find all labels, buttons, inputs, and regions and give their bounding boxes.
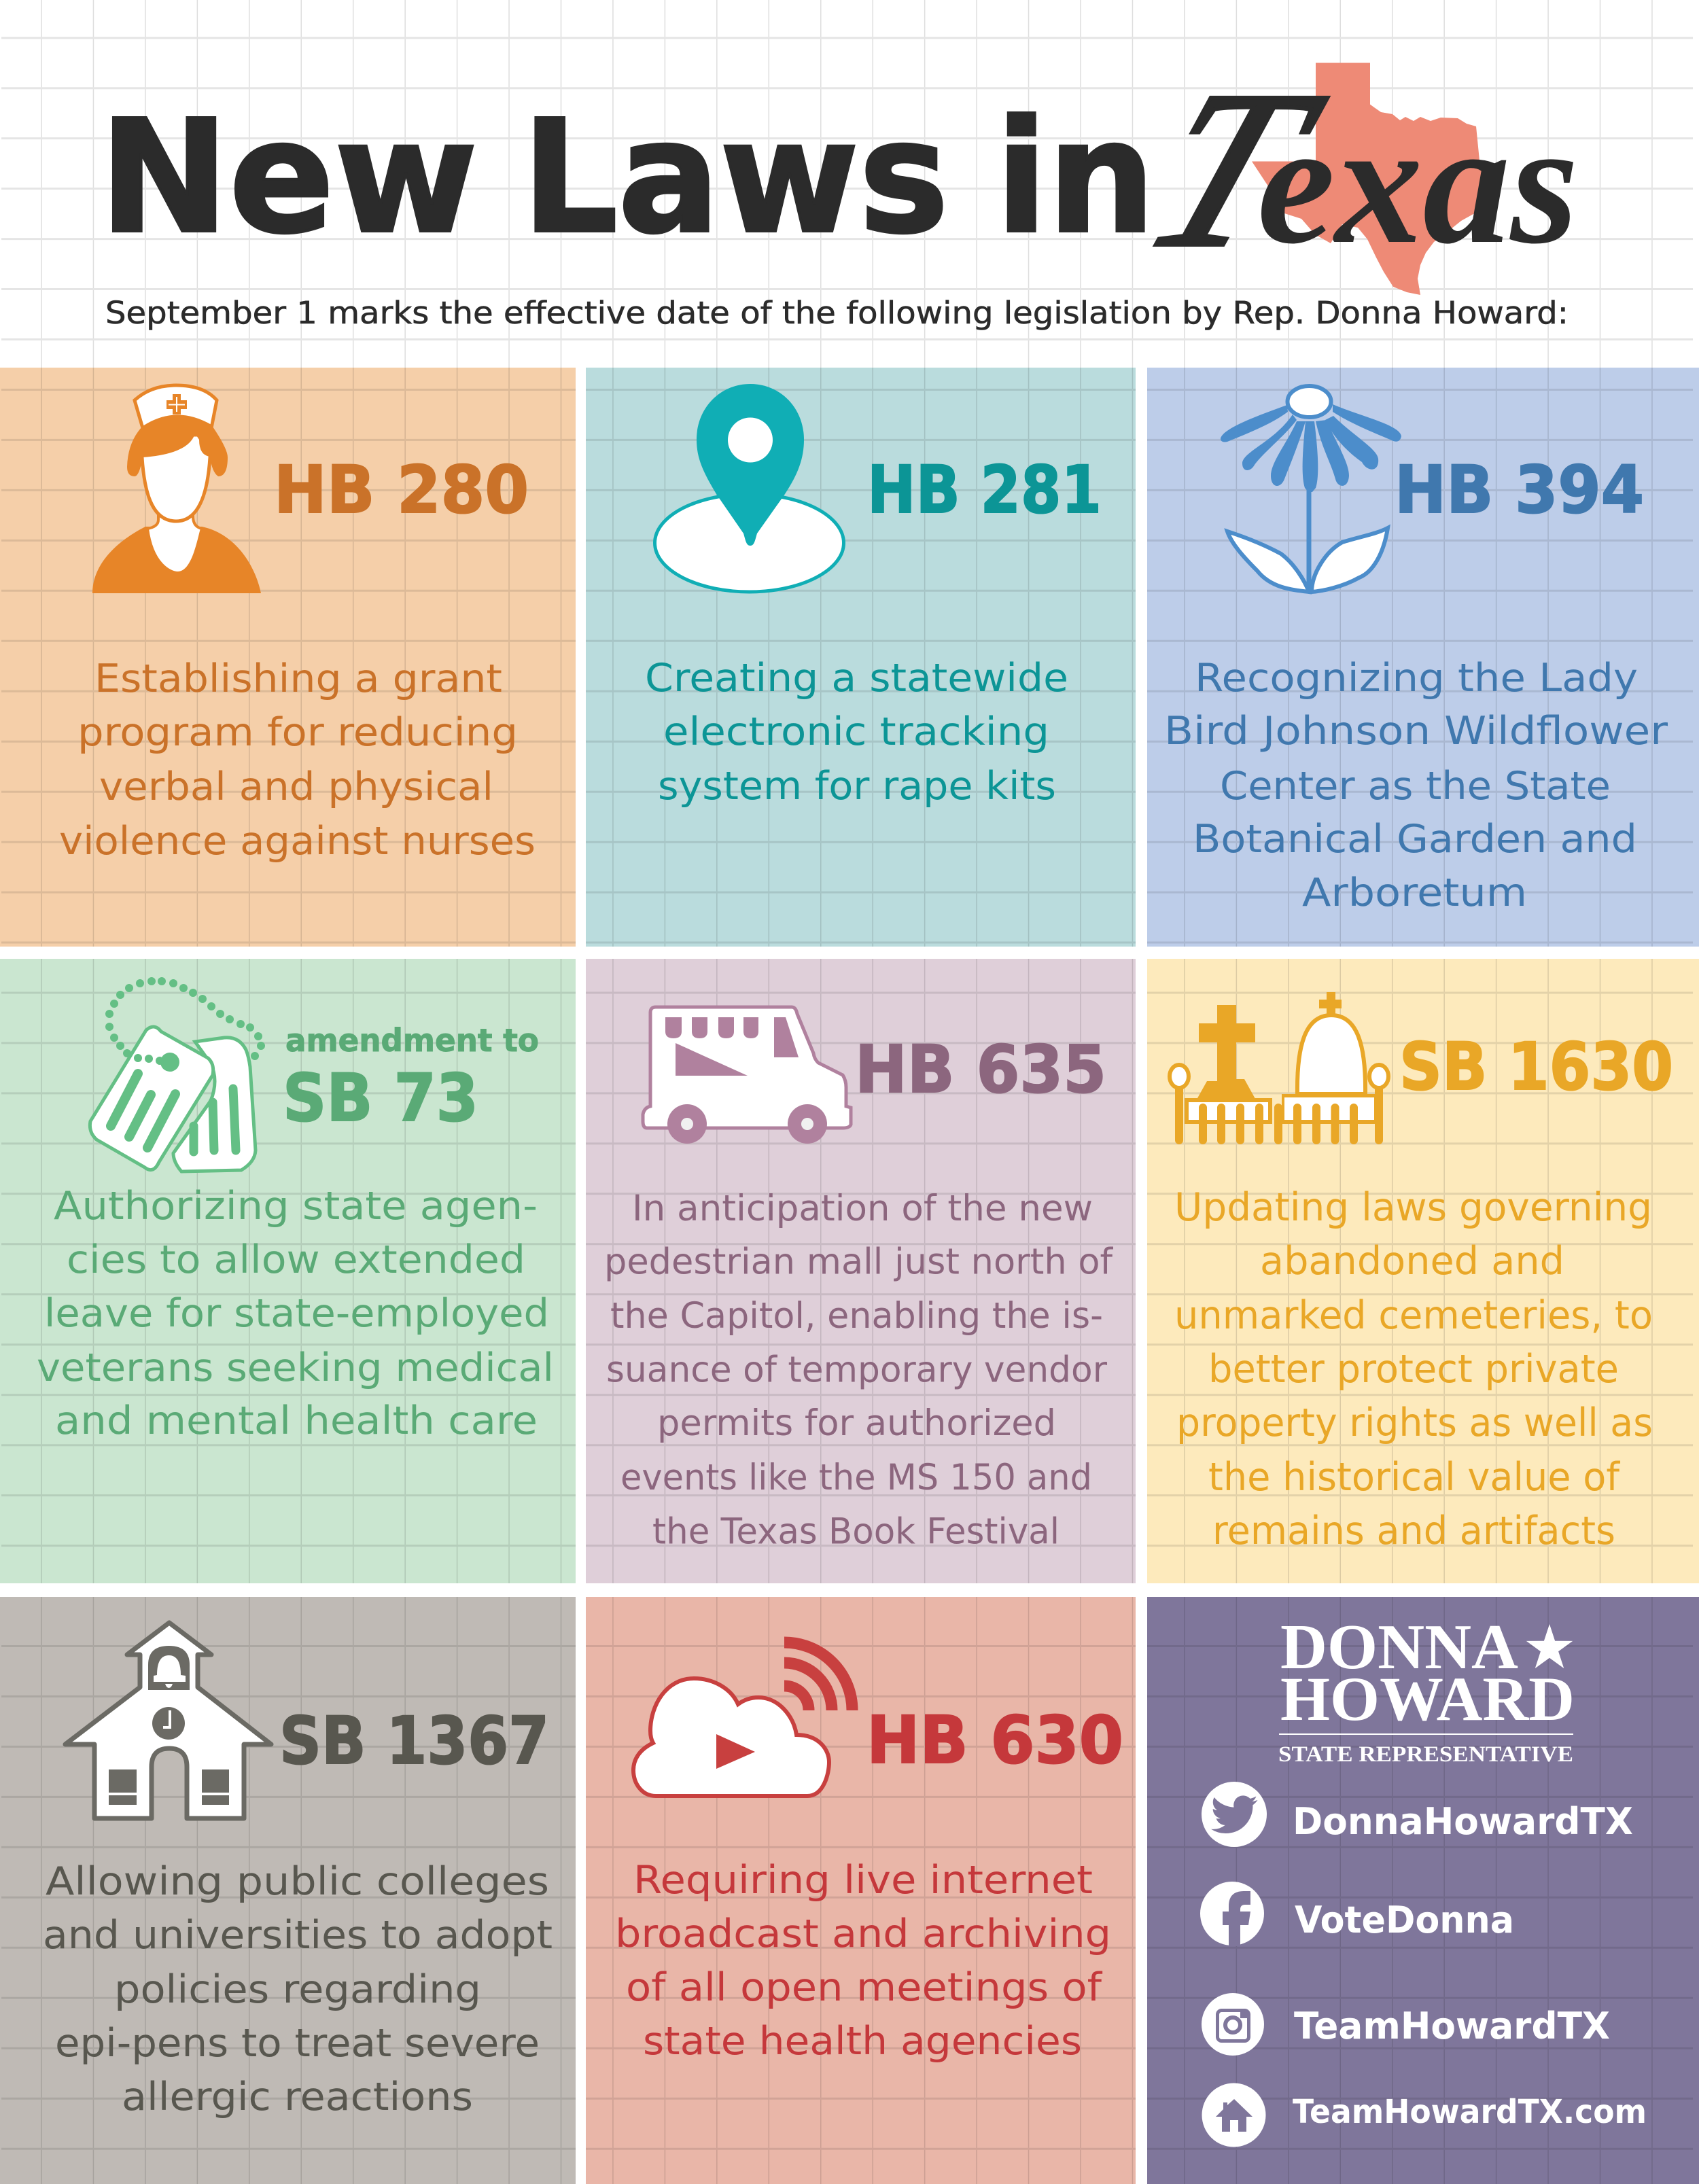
description: Arboretum <box>1302 870 1527 915</box>
icon: nurse <box>92 385 261 593</box>
panel: HB 635 <box>586 959 1136 1583</box>
panel: amendment to SB 73 <box>0 959 576 1583</box>
description: electronic tracking <box>663 709 1049 754</box>
description: Bird Johnson Wildflower <box>1164 709 1668 754</box>
description: Requiring live internet <box>633 1858 1093 1903</box>
panel: HB 630 <box>586 1597 1136 2184</box>
description: abandoned and <box>1260 1239 1564 1284</box>
description <box>615 1858 1111 2064</box>
icon: schoolhouse <box>65 1623 271 1818</box>
heading: New Laws in: New <box>99 87 478 268</box>
contact: Instagram: TeamHowardTX <box>1294 2005 1610 2047</box>
description: state health agencies <box>643 2019 1082 2064</box>
heading: New Laws in: in <box>996 87 1155 268</box>
contact: Instagram <box>1202 1993 1610 2056</box>
description: In anticipation of the new <box>632 1188 1093 1229</box>
description: unmarked cemeteries, to <box>1174 1293 1653 1338</box>
icon: streaming cloud <box>633 1642 852 1796</box>
description <box>43 1859 553 2119</box>
heading: HB 394: HB 394 <box>1395 452 1644 528</box>
description: allergic reactions <box>122 2075 473 2119</box>
description: better protect private <box>1208 1347 1619 1392</box>
description <box>645 656 1068 809</box>
description <box>1164 656 1668 915</box>
description: broadcast and archiving <box>615 1912 1111 1956</box>
description: epi-pens to treat severe <box>55 2021 540 2066</box>
description: Creating a statewide <box>645 656 1068 701</box>
description: leave for state-employed <box>44 1291 549 1336</box>
description: cies to allow extended <box>67 1237 525 1282</box>
description: the historical value of <box>1208 1455 1621 1500</box>
description: Establishing a grant <box>94 656 502 701</box>
heading: Texas script: exas <box>1257 86 1579 280</box>
description: remains and artifacts <box>1212 1509 1615 1553</box>
heading: HB 280: HB 280 <box>274 452 529 528</box>
description: system for rape kits <box>658 764 1056 809</box>
description: permits for authorized <box>657 1403 1056 1444</box>
heading: New Laws in: Laws <box>522 87 949 268</box>
title: New Laws in Texas <box>99 45 1579 295</box>
description: verbal and physical <box>99 764 493 809</box>
contact: Facebook: VoteDonna <box>1295 1899 1514 1941</box>
description <box>59 656 536 864</box>
contact: Twitter: DonnaHowardTX <box>1293 1800 1633 1843</box>
icon: map pin <box>655 384 844 592</box>
description: the Texas Book Festival <box>652 1511 1059 1552</box>
description: events like the MS 150 and <box>620 1457 1092 1498</box>
description: and mental health care <box>55 1398 538 1443</box>
contact: Facebook <box>1200 1882 1514 1946</box>
heading: Texas script: T <box>1119 45 1349 294</box>
panel: SB 1367 <box>0 1597 576 2184</box>
heading: HB 630: HB 630 <box>866 1702 1123 1778</box>
logo: Donna Howard State Representative: HOWARD <box>1280 1664 1575 1733</box>
description: Botanical Garden and <box>1193 817 1637 862</box>
description: Updating laws governing <box>1174 1185 1652 1230</box>
icon: wildflower <box>1221 386 1401 592</box>
icon: dog tags <box>90 977 265 1172</box>
description: program for reducing <box>77 710 518 755</box>
heading: SB 1367: SB 1367 <box>279 1703 549 1779</box>
description: veterans seeking medical <box>37 1345 554 1390</box>
heading: SB 1630: SB 1630 <box>1399 1029 1673 1105</box>
description: of all open meetings of <box>626 1965 1103 2010</box>
heading: SB 73: SB 73 <box>283 1060 478 1136</box>
description: and universities to adopt <box>43 1913 553 1958</box>
subtitle: September 1 marks the effective date of the following legislation by Rep. Donna Howard: <box>105 295 1569 331</box>
contact: Twitter <box>1202 1782 1633 1847</box>
logo: Donna Howard State Representative <box>1278 1612 1575 1767</box>
icon: food truck <box>643 1007 851 1144</box>
description: suance of temporary vendor <box>606 1350 1107 1390</box>
contact: website <box>1202 2083 1647 2147</box>
description <box>604 1188 1113 1552</box>
panel: contact <box>1147 1597 1699 2184</box>
description: the Capitol, enabling the is- <box>610 1295 1103 1337</box>
description: property rights as well as <box>1176 1401 1653 1445</box>
description: Recognizing the Lady <box>1195 656 1638 701</box>
description: pedestrian mall just north of <box>604 1241 1113 1283</box>
heading: New Laws in <box>99 87 1155 268</box>
heading: amendment to: amendment to <box>285 1022 539 1059</box>
logo: Donna Howard State Representative: DONNA <box>1280 1612 1518 1683</box>
description: policies regarding <box>114 1967 481 2012</box>
contact: website: TeamHowardTX.com <box>1293 2093 1647 2131</box>
description: violence against nurses <box>59 819 536 864</box>
Texas state silhouette <box>1252 63 1487 295</box>
heading: HB 281: HB 281 <box>867 452 1102 528</box>
description <box>37 1184 554 1443</box>
description <box>1174 1185 1653 1553</box>
description: Allowing public colleges <box>46 1859 549 1904</box>
icon: cemetery <box>1170 992 1388 1140</box>
panel: SB 1630 <box>1147 959 1699 1583</box>
heading: Texas script <box>1119 45 1579 294</box>
panel: HB 281 <box>586 368 1136 947</box>
heading: HB 635: HB 635 <box>855 1032 1106 1108</box>
panel: HB 280 <box>0 368 576 947</box>
logo: Donna Howard State Representative: STATE REPRESENTATIVE <box>1278 1742 1573 1767</box>
description: Center as the State <box>1220 764 1611 809</box>
description: Authorizing state agen- <box>54 1184 538 1229</box>
panel: HB 394 <box>1147 368 1699 947</box>
